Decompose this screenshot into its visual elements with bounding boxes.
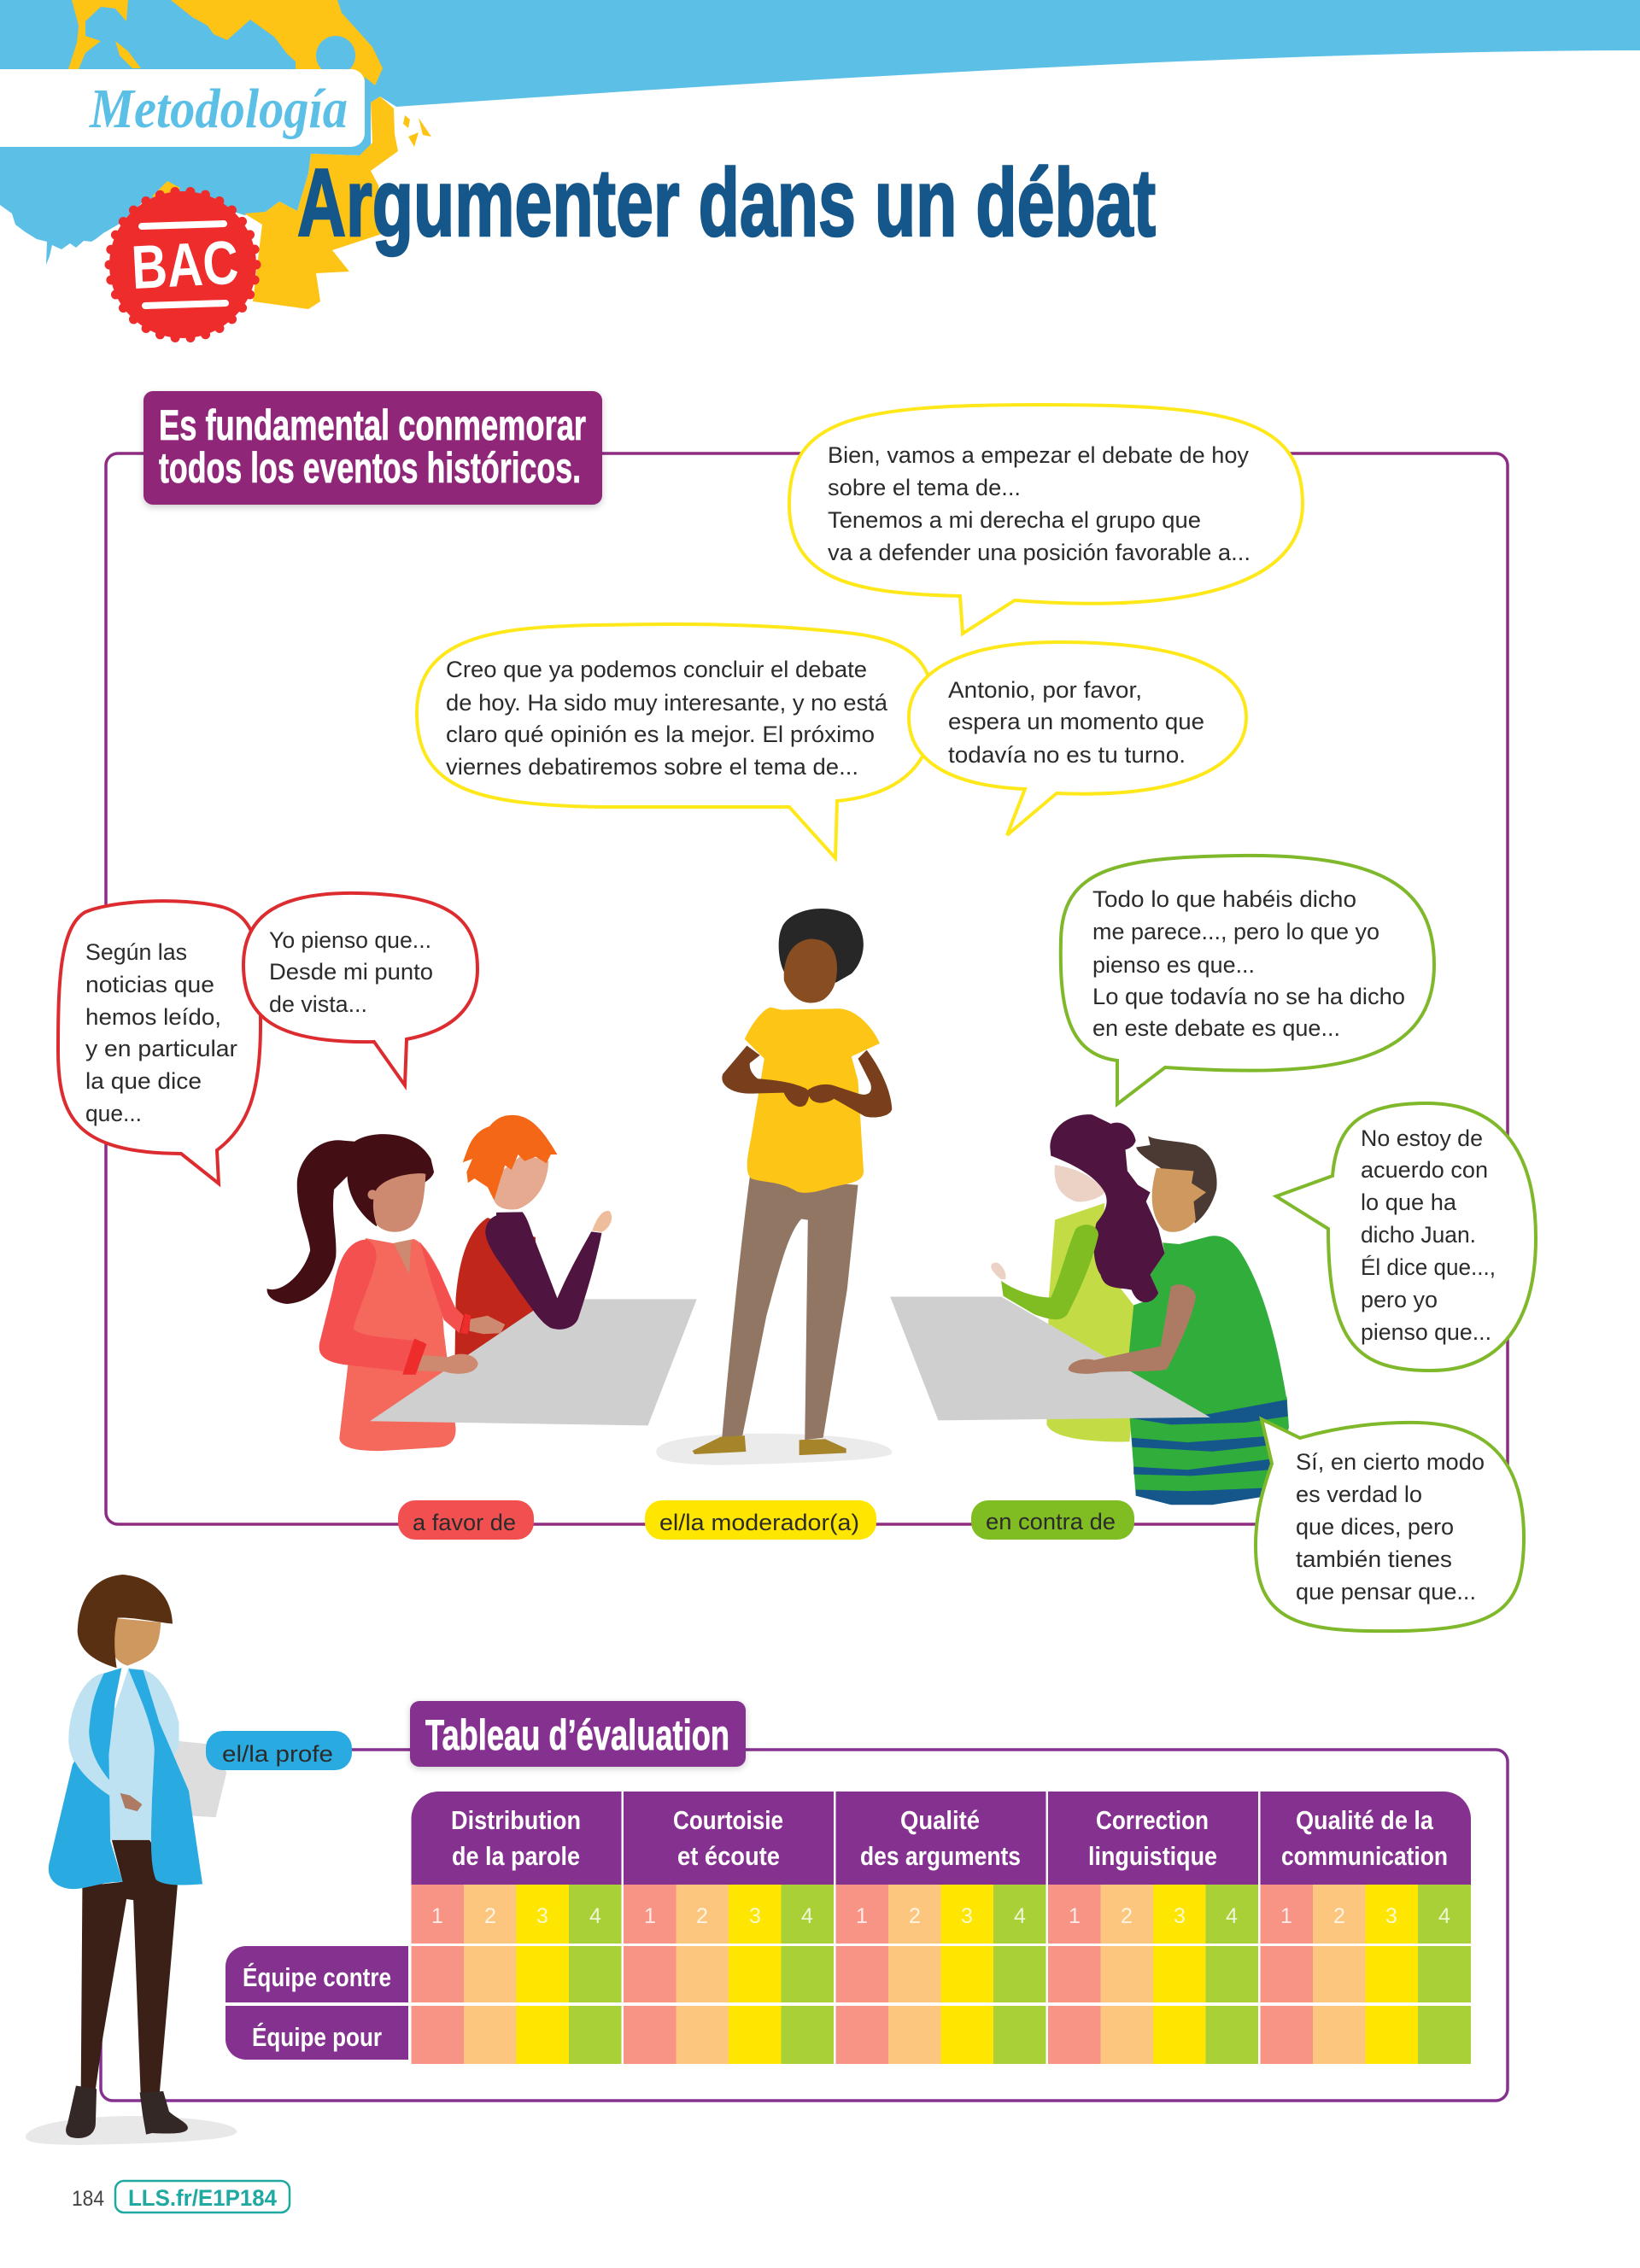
score numbers: 4 [589, 1904, 601, 1928]
speech bubble: moderator interruption: espera un momento que [948, 709, 1204, 734]
speech bubble: según las noticias: Según las [85, 939, 187, 965]
score numbers: 2 [484, 1904, 496, 1928]
speech bubble: todo lo que habéis dicho [1061, 856, 1434, 1104]
label: Metodología [0, 69, 365, 147]
score numbers: 3 [749, 1904, 761, 1928]
arms [319, 1211, 612, 1375]
label: Metodología: Metodología [89, 78, 348, 140]
column headers: Distribution [451, 1805, 581, 1835]
speech bubble: todo lo que habéis dicho: pienso es que... [1092, 952, 1255, 978]
row label: équipe contre [226, 1946, 408, 2002]
girl with ponytail [267, 1134, 456, 1451]
table right [890, 1296, 1210, 1420]
speech bubble: no estoy de acuerdo: dicho Juan. [1361, 1222, 1476, 1248]
tag: en contra de: en contra de [986, 1509, 1116, 1534]
tag: a favor de [398, 1500, 534, 1540]
score numbers: 2 [909, 1904, 921, 1928]
girl with green top [1046, 1165, 1133, 1441]
colour score columns [411, 1885, 1472, 2064]
moderator [656, 909, 892, 1465]
score numbers: 1 [1069, 1904, 1081, 1928]
heading: tableau d'évaluation: Tableau d’évaluation [425, 1711, 729, 1759]
speech bubble: sí, en cierto modo: es verdad lo [1296, 1482, 1422, 1507]
score numbers: 1 [856, 1904, 868, 1928]
panel: debate frame [106, 453, 1508, 1524]
speech bubble: moderator conclusion: claro qué opinión es la mejor. El próximo [446, 722, 875, 747]
illustration: teacher [26, 1575, 237, 2145]
blue cape [49, 1668, 202, 1889]
title: Argumenter dans un débat [297, 149, 1156, 256]
column headers: des arguments [860, 1841, 1021, 1871]
evaluation table [226, 1792, 1472, 2064]
boy shirt with stripes [1122, 1236, 1289, 1505]
page number: 184 [72, 2187, 104, 2211]
blue banner splash [0, 0, 1640, 265]
speech bubble: según las noticias: y en particular [85, 1036, 237, 1061]
speech bubble: sí, en cierto modo: también tienes [1296, 1546, 1452, 1572]
folder [167, 1739, 226, 1817]
speech bubble: según las noticias: noticias que [85, 972, 214, 997]
badge: BAC [109, 191, 256, 338]
speech bubble: moderator interruption: todavía no es tu turno. [948, 742, 1186, 768]
speech bubble: moderator interruption: Antonio, por favor, [948, 677, 1142, 703]
speech bubble: moderator conclusion [417, 624, 934, 858]
speech bubble: no estoy de acuerdo [1276, 1103, 1536, 1371]
score numbers: 4 [801, 1904, 813, 1928]
speech bubble: moderator opening: Bien, vamos a empezar el debate de hoy [828, 442, 1249, 468]
speech bubble: no estoy de acuerdo: pienso que... [1361, 1319, 1491, 1345]
score numbers: 3 [1174, 1904, 1186, 1928]
blouse [68, 1668, 179, 1840]
sleeve and hand [68, 1674, 142, 1811]
row label: équipe pour: Équipe pour [252, 2022, 382, 2052]
speech bubble: yo pienso: de vista... [269, 991, 367, 1017]
table left [370, 1299, 697, 1425]
score numbers [431, 1904, 1450, 1928]
column headers [412, 1792, 1471, 1885]
score numbers: 3 [536, 1904, 548, 1928]
speech bubble: sí, en cierto modo: que pensar que... [1296, 1579, 1476, 1605]
heading: tableau d'évaluation [410, 1701, 746, 1767]
header paint splashes [0, 0, 1640, 309]
heading: debate topic: todos los eventos históricos. [159, 444, 581, 492]
illustration: team against at table [890, 1114, 1289, 1505]
score numbers: 1 [431, 1904, 443, 1928]
score numbers: 4 [1226, 1904, 1238, 1928]
speech bubble: moderator interruption [909, 642, 1246, 835]
speech bubble: sí, en cierto modo: que dices, pero [1296, 1514, 1454, 1540]
boy head [1136, 1136, 1217, 1232]
speech bubble: todo lo que habéis dicho: Lo que todavía no se ha dicho [1092, 984, 1405, 1009]
speech bubble: moderator conclusion: de hoy. Ha sido muy interesante, y no está [446, 690, 888, 716]
score numbers: 2 [696, 1904, 708, 1928]
speech bubble: moderator conclusion: Creo que ya podemos concluir el debate [446, 657, 867, 682]
column headers: et écoute [677, 1841, 780, 1871]
speech bubble: no estoy de acuerdo: lo que ha [1361, 1190, 1457, 1215]
score numbers: 2 [1333, 1904, 1345, 1928]
column headers: linguistique [1088, 1841, 1217, 1871]
row label: équipe contre: Équipe contre [243, 1962, 391, 1992]
tag: el/la profe: el/la profe [222, 1741, 333, 1767]
tag: el/la moderador(a) [645, 1500, 876, 1540]
arms [991, 1225, 1196, 1374]
score numbers: 2 [1121, 1904, 1133, 1928]
speech bubble: sí, en cierto modo: Sí, en cierto modo [1296, 1449, 1485, 1475]
speech bubble: sí, en cierto modo [1256, 1419, 1524, 1631]
tag: en contra de [971, 1500, 1134, 1540]
legs and boots [66, 1840, 188, 2138]
link tag: LLS.fr/E1P184 [128, 2185, 277, 2211]
speech bubble: moderator opening: sobre el tema de... [828, 475, 1021, 500]
shadow [26, 2116, 237, 2145]
panel: evaluation frame [101, 1750, 1508, 2101]
speech bubble: no estoy de acuerdo: pero yo [1361, 1287, 1438, 1312]
speech bubble: moderator opening: va a defender una posición favorable a... [828, 540, 1250, 565]
score numbers: 4 [1438, 1904, 1450, 1928]
score numbers: 3 [1385, 1904, 1397, 1928]
head and hair [78, 1575, 173, 1668]
tag: el/la moderador(a): el/la moderador(a) [659, 1510, 859, 1535]
speech bubble: moderator opening [789, 405, 1303, 634]
score numbers: 4 [1014, 1904, 1026, 1928]
boy vest and head [455, 1115, 557, 1355]
speech bubble: no estoy de acuerdo: acuerdo con [1361, 1157, 1488, 1183]
speech bubble: yo pienso [243, 893, 477, 1085]
tag: a favor de: a favor de [413, 1510, 516, 1535]
speech bubble: según las noticias [58, 901, 261, 1184]
score numbers: 1 [644, 1904, 656, 1928]
speech bubble: todo lo que habéis dicho: Todo lo que habéis dicho [1092, 886, 1356, 912]
score numbers: 3 [961, 1904, 973, 1928]
speech bubble: todo lo que habéis dicho: en este debate es que... [1092, 1015, 1340, 1041]
yellow splash pieces [171, 0, 383, 85]
column headers: Qualité de la [1296, 1805, 1434, 1835]
speech bubble: no estoy de acuerdo: Él dice que..., [1361, 1254, 1496, 1280]
tag: el/la profe [206, 1731, 352, 1770]
speech bubble: moderator conclusion: viernes debatiremos sobre el tema de... [446, 754, 858, 780]
score numbers: 1 [1280, 1904, 1292, 1928]
speech bubble: según las noticias: que... [85, 1101, 142, 1126]
badge: BAC: BAC [130, 229, 240, 302]
speech bubble: yo pienso: Yo pienso que... [269, 927, 431, 953]
illustration: team in favour at table [267, 909, 892, 1465]
speech bubble: no estoy de acuerdo: No estoy de [1361, 1125, 1483, 1151]
column headers: de la parole [452, 1841, 580, 1871]
speech bubble: según las noticias: la que dice [85, 1068, 202, 1094]
heading: debate topic [144, 391, 602, 505]
column headers: Correction [1096, 1805, 1209, 1835]
speech bubble: yo pienso: Desde mi punto [269, 959, 433, 985]
column headers: communication [1281, 1841, 1448, 1871]
column headers: Qualité [900, 1805, 980, 1835]
column headers: Courtoisie [673, 1805, 783, 1835]
row label: équipe pour [226, 2006, 408, 2060]
heading: debate topic: Es fundamental conmemorar [159, 401, 586, 449]
speech bubble: según las noticias: hemos leído, [85, 1004, 221, 1030]
long hair [1050, 1114, 1165, 1302]
speech bubble: todo lo que habéis dicho: me parece..., pero lo que yo [1092, 919, 1379, 944]
speech bubble: moderator opening: Tenemos a mi derecha el grupo que [828, 507, 1201, 533]
